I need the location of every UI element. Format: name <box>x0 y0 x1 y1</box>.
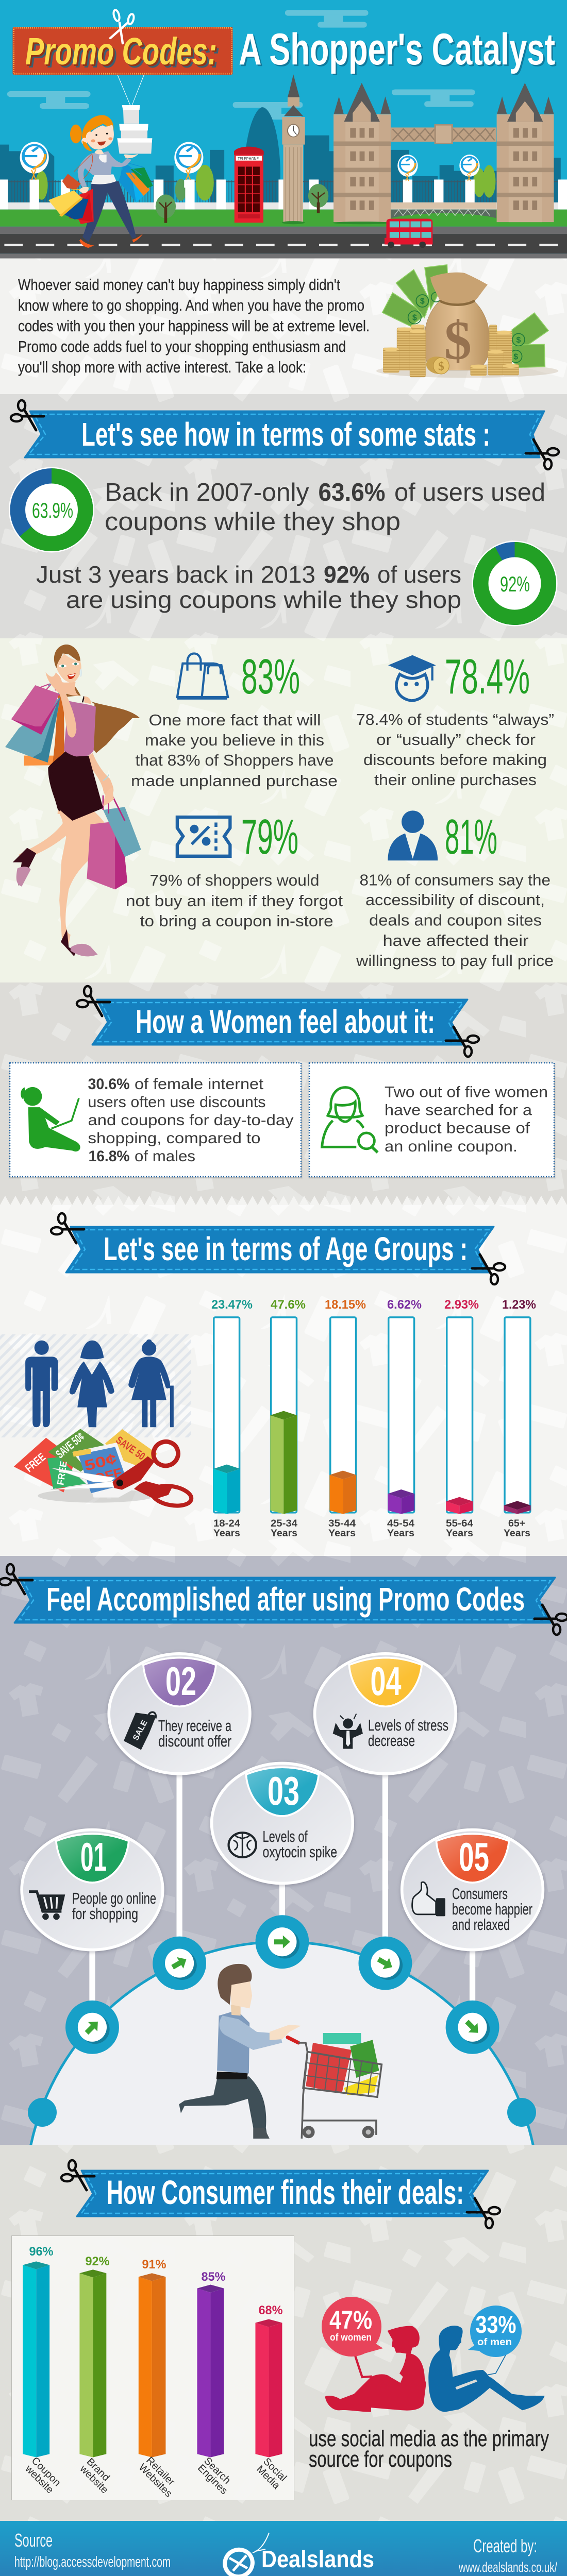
illustration: woman carrying gift boxes and bags <box>48 105 153 248</box>
stat: 83% <box>131 649 338 790</box>
age labels: 55-64 <box>446 1518 473 1529</box>
donut: 92%: 92% <box>500 572 530 596</box>
step numbers: 04 <box>370 1658 401 1704</box>
stat: 83%: 83% <box>241 649 300 704</box>
chart values: 96% <box>29 2245 54 2259</box>
caption <box>309 2426 549 2472</box>
bar: 65+ <box>504 1501 531 1514</box>
illustration: London street scene <box>0 10 567 259</box>
stat: 78.4% <box>356 649 554 789</box>
card: two out of five women: product because of <box>385 1120 530 1137</box>
icon: brain <box>229 1833 256 1857</box>
card: 30.6% of female users: users often use discounts <box>88 1094 266 1111</box>
stat: 83%: that 83% of Shoppers have <box>135 751 334 769</box>
bar: 35-44 <box>329 1470 356 1514</box>
telephone label: TELEPHONE <box>238 157 259 161</box>
card: two out of five women: Two out of five women <box>385 1084 548 1100</box>
intro text: you'll shop more with active interest. Take a look: <box>18 358 306 376</box>
stat: 81%: 81% of consumers say the <box>360 871 551 889</box>
source: http://blog.accessdevelopment.com <box>14 2554 171 2570</box>
stat: 81% <box>356 809 554 970</box>
step text: oxytocin spike <box>263 1843 337 1861</box>
text labels <box>211 1298 536 1312</box>
card: 30.6% of female users: shopping, compared to <box>88 1130 261 1147</box>
chart panel <box>11 2236 294 2500</box>
icon: people silhouettes <box>25 1340 174 1427</box>
stat: 79%: 79% of shoppers would <box>149 871 320 889</box>
age labels: 65+ <box>508 1518 525 1529</box>
chart category labels: website <box>23 2463 56 2496</box>
icon: coupons and red scissors: FREE <box>23 1450 48 1475</box>
card: two out of five women: an online coupon. <box>385 1138 518 1155</box>
title <box>25 25 555 74</box>
step text <box>72 1716 532 1934</box>
text labels: 1.23% <box>502 1298 536 1312</box>
age labels: Years <box>387 1528 414 1539</box>
chart values: 68% <box>259 2303 282 2317</box>
card: 30.6% of female users <box>10 1063 301 1177</box>
stat: 78.4%: discounts before making <box>363 751 547 769</box>
age labels: 25-34 <box>271 1518 297 1529</box>
stat: 81%: 81% <box>445 809 497 865</box>
bubbles <box>22 1654 543 1950</box>
card: 30.6% of female users: 30.6% <box>88 1076 130 1093</box>
intro text: Promo code adds fuel to your shopping enthusiasm and <box>18 337 346 355</box>
chart category labels: Engines <box>195 2462 230 2497</box>
age labels: Years <box>328 1528 356 1539</box>
step text: decrease <box>368 1732 415 1750</box>
icon: coupons and red scissors: SAVE 50¢ <box>53 1430 87 1461</box>
stat: 81%: accessibility of discount, <box>365 891 545 909</box>
bar: search engines <box>197 2285 224 2458</box>
London landmarks <box>282 74 554 224</box>
icon: money bag with coins and notes <box>376 265 558 378</box>
stat text: 2013 <box>36 561 461 613</box>
stat: 79% <box>126 809 343 930</box>
stat text: 2007 <box>105 479 545 536</box>
white scissors <box>110 9 135 43</box>
title: Promo Codes: <box>25 30 217 73</box>
card: 30.6% of female users: of female internet <box>135 1076 264 1093</box>
card: two out of five women: have searched for a <box>385 1101 532 1119</box>
bubble: 33% of men: of men <box>477 2337 512 2348</box>
logo: Dealslands <box>221 2533 374 2576</box>
bar: coupon website <box>23 2261 49 2458</box>
icon: coupons and red scissors: SAVE 50 <box>113 1434 147 1463</box>
step text: and relaxed <box>452 1916 510 1934</box>
step text: Levels of <box>263 1827 308 1845</box>
red bus <box>385 218 432 248</box>
bar: 25-34 <box>270 1411 297 1514</box>
icon: coupons and red scissors: OFF <box>93 1466 124 1486</box>
icon: thumbs up <box>412 1882 445 1916</box>
age labels: 35-44 <box>328 1518 356 1529</box>
step text: People go online <box>72 1889 156 1907</box>
icon: person <box>388 810 438 860</box>
banner: women: How a Women feel about it: <box>136 1003 435 1040</box>
banner: how consumer finds deals <box>61 2160 500 2228</box>
age labels: Years <box>504 1528 530 1539</box>
bubble: 33% of men: 33% <box>475 2311 516 2338</box>
footer <box>0 2521 567 2576</box>
bar: 18-24 <box>213 1465 240 1514</box>
stat: 81%: willingness to pay full price <box>356 952 554 970</box>
text labels: 47.6% <box>271 1298 306 1312</box>
donut: 63.9% <box>9 467 94 552</box>
stat: 79%: 79% <box>241 809 298 865</box>
caption: source for coupons <box>309 2447 452 2472</box>
step numbers: 05 <box>459 1834 489 1879</box>
source <box>14 2530 171 2570</box>
credit: Created by: <box>473 2535 537 2556</box>
icon: money bag with coins and notes: $ <box>513 352 518 361</box>
card: 30.6% of female users: 16.8% <box>89 1148 130 1165</box>
donut: 92% <box>472 541 558 626</box>
chart category labels: website <box>77 2463 110 2496</box>
stat: 81%: deals and coupon sites <box>369 911 542 929</box>
age labels <box>213 1518 530 1539</box>
illustration: man with trolley <box>179 1964 381 2139</box>
bubble: 47% of women: of women <box>330 2332 372 2343</box>
card: two out of five women <box>309 1063 554 1177</box>
bar chart: age groups <box>213 1317 531 1514</box>
stat: 78.4%: 78.4% of students “always” <box>356 710 554 728</box>
chart values: 92% <box>86 2255 109 2268</box>
icon: money bag with coins and notes: $ <box>420 297 425 306</box>
age labels: 45-54 <box>387 1518 414 1529</box>
stat text: 2007: coupons while they shop <box>105 508 401 536</box>
icon: stressed man <box>333 1714 363 1749</box>
credit <box>458 2535 557 2575</box>
icon: coupons and red scissors: FREE <box>55 1461 69 1486</box>
step text: Levels of stress <box>368 1716 448 1734</box>
donut: 63.9%: 63.9% <box>32 498 73 522</box>
arc stage <box>28 1942 536 2145</box>
step text: become happier <box>452 1900 532 1918</box>
bar: retailer websites <box>139 2273 165 2458</box>
stat text: 2007: of users used <box>394 479 545 506</box>
illustration: woman with shopping bags <box>5 645 141 956</box>
icon: money bag with coins and notes: $ <box>444 311 472 371</box>
icon: coupons and red scissors <box>14 1429 193 1509</box>
number caps <box>56 1658 509 1883</box>
stat text: 2007: 63.6% <box>319 479 386 506</box>
chart category labels: Media <box>254 2464 282 2492</box>
step text: discount offer <box>158 1732 231 1750</box>
illustration: woman and man with laptops <box>325 2326 545 2412</box>
logo: Dealslands: Dealslands <box>261 2546 374 2572</box>
step text: They receive a <box>158 1717 232 1735</box>
text labels: 6.62% <box>387 1298 422 1312</box>
stat: 78.4%: their online purchases <box>374 771 537 789</box>
step nodes <box>65 1915 499 2054</box>
chart values <box>29 2245 282 2317</box>
intro text: Whoever said money can't buy happiness simply didn't <box>18 276 340 294</box>
bar: social media <box>255 2319 282 2458</box>
text labels: 18.15% <box>325 1298 366 1312</box>
stat: 79%: not buy an item if they forgot <box>126 892 343 910</box>
icon: money bag with coins and notes: $ <box>412 314 417 323</box>
chart category labels: Search <box>202 2455 232 2486</box>
icon: cart <box>29 1892 65 1920</box>
chart values: 91% <box>142 2258 166 2272</box>
chart category labels: Retailer <box>144 2455 177 2488</box>
step numbers: 03 <box>268 1768 299 1814</box>
age labels: Years <box>213 1528 240 1539</box>
telephone box <box>234 147 264 223</box>
bubble: 47% of women: 47% <box>329 2306 372 2334</box>
step numbers: 02 <box>165 1658 196 1704</box>
step numbers <box>80 1658 489 1879</box>
step text: Consumers <box>452 1885 508 1903</box>
step numbers: 01 <box>80 1834 107 1879</box>
banner: age groups <box>51 1213 505 1284</box>
stat text: 2007: Back in 2007-only <box>105 479 309 506</box>
bubble: 47% of women <box>322 2297 383 2357</box>
source: Source <box>14 2530 53 2551</box>
banner: stats <box>11 400 559 469</box>
intro text: codes with you then your happiness will be at extreme level. <box>18 317 370 335</box>
stat: 83%: made unplanned purchase <box>131 772 338 790</box>
bar: brand website <box>79 2269 106 2458</box>
chart category labels: Social <box>261 2456 289 2484</box>
banner: women <box>77 986 479 1057</box>
age labels: 18-24 <box>213 1518 240 1529</box>
stat text: 2013: Just 3 years back in 2013 <box>36 561 315 588</box>
icon: coupons and red scissors: 50¢ <box>83 1450 119 1475</box>
stat text: 2013: are using coupons while they shop <box>66 586 461 613</box>
chart category labels: Brand <box>85 2456 112 2483</box>
icon: sale tag <box>124 1712 156 1750</box>
step text: for shopping <box>72 1905 138 1923</box>
stat text: 2013: 92% <box>324 561 370 588</box>
stat: 83%: make you believe in this <box>145 731 324 749</box>
age labels: Years <box>446 1528 473 1539</box>
bar: 55-64 <box>446 1497 473 1514</box>
banner: accomplished <box>0 1564 567 1635</box>
card: 30.6% of female users: and coupons for day-to-day <box>88 1112 294 1129</box>
intro text: know where to go shopping. And when you have the promo <box>18 296 364 314</box>
intro text <box>18 276 370 376</box>
text labels: 2.93% <box>444 1298 479 1312</box>
icon: money bag with coins and notes: $ <box>438 360 444 373</box>
icon: money bag with coins and notes: $ <box>516 336 521 345</box>
stat text: 2013: of users <box>377 561 461 588</box>
bar: 45-54 <box>388 1489 414 1514</box>
age labels: Years <box>271 1528 297 1539</box>
icon: coupon ticket <box>177 817 230 856</box>
chart values: 85% <box>201 2270 226 2284</box>
stat: 81%: have affected their <box>382 931 529 950</box>
icon: woman at laptop <box>21 1087 80 1151</box>
stat: 79%: to bring a coupon in-store <box>140 912 333 930</box>
text labels: 23.47% <box>211 1298 253 1312</box>
steps diagram <box>22 1654 543 2054</box>
chart category labels: Websites <box>137 2462 174 2499</box>
promo label with strings <box>12 27 233 75</box>
SALE label on tag: SALE <box>131 1719 149 1742</box>
chart category labels <box>23 2455 289 2499</box>
icon: shopping bags <box>177 653 228 699</box>
bar chart: deal sources <box>23 2261 282 2458</box>
stat: 83%: One more fact that will <box>148 711 321 729</box>
stat: 78.4%: or “usually” check for <box>376 731 536 749</box>
card: 30.6% of female users: of males <box>135 1148 195 1165</box>
bubble: 33% of men <box>468 2306 522 2357</box>
icon: woman with magnifier <box>322 1088 378 1153</box>
chart category labels: Coupon <box>29 2455 63 2488</box>
icon: student cap <box>388 655 436 701</box>
